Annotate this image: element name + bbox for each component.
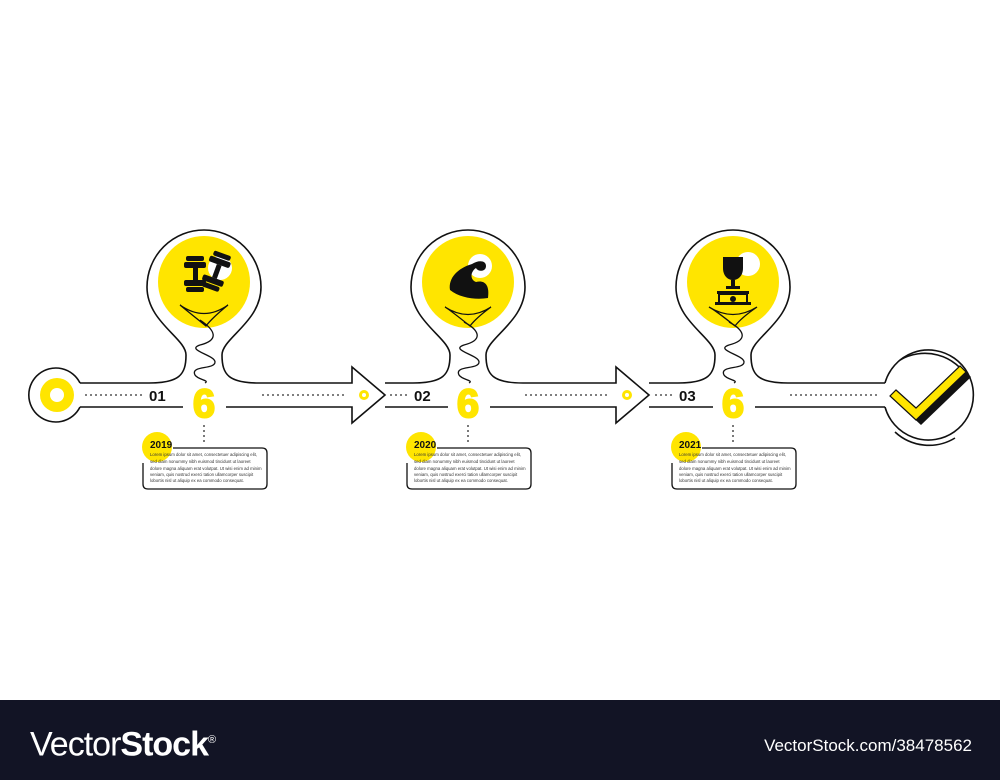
icon: dumbbells xyxy=(184,250,233,293)
start marker xyxy=(40,378,74,412)
text boxes: sed diam nonummy nibh euismod tincidunt ut laoreet xyxy=(150,459,251,464)
step numbers: 01 xyxy=(149,388,166,405)
text boxes: lobortis nisl ut aliquip ex ea commodo consequat. xyxy=(150,478,244,483)
text boxes: Lorem ipsum dolor sit amet, consectetuer adipiscing elit, xyxy=(679,452,786,457)
url text: VectorStock.com/38478562 xyxy=(764,736,972,755)
text boxes: lobortis nisl ut aliquip ex ea commodo consequat. xyxy=(679,478,773,483)
icon: trophy xyxy=(715,257,751,305)
dotted guides xyxy=(85,395,880,445)
logo text: VectorStock® xyxy=(30,725,215,763)
footer banner xyxy=(0,700,1000,780)
text boxes xyxy=(142,432,796,489)
step 2 bulb xyxy=(422,236,514,383)
step 1 bulb xyxy=(158,236,250,383)
step 3 bulb xyxy=(687,236,779,383)
text boxes: 2020 xyxy=(414,440,437,451)
text boxes: veniam, quis nostrud exerci tation ullamcorper suscipit xyxy=(679,472,783,477)
text boxes: 2019 xyxy=(150,440,173,451)
checkmark xyxy=(890,366,971,425)
text boxes: Lorem ipsum dolor sit amet, consectetuer adipiscing elit, xyxy=(150,452,257,457)
text boxes: Lorem ipsum dolor sit amet, consectetuer adipiscing elit, xyxy=(414,452,521,457)
step numbers: 03 xyxy=(679,388,696,405)
yellow sixes: 6 xyxy=(193,382,215,426)
text boxes: lobortis nisl ut aliquip ex ea commodo consequat. xyxy=(414,478,508,483)
text boxes: sed diam nonummy nibh euismod tincidunt ut laoreet xyxy=(679,459,780,464)
arrow dots xyxy=(359,390,632,400)
yellow sixes: 6 xyxy=(722,382,744,426)
track outline xyxy=(29,230,973,445)
text boxes: veniam, quis nostrud exerci tation ullamcorper suscipit xyxy=(414,472,518,477)
text boxes: veniam, quis nostrud exerci tation ullamcorper suscipit xyxy=(150,472,254,477)
text boxes: dolore magna aliquam erat volutpat. Ut wisi enim ad minim xyxy=(414,466,526,471)
step numbers: 02 xyxy=(414,388,431,405)
text boxes: sed diam nonummy nibh euismod tincidunt ut laoreet xyxy=(414,459,515,464)
step numbers xyxy=(149,388,696,405)
yellow sixes xyxy=(193,382,744,426)
text boxes: 2021 xyxy=(679,440,702,451)
icon: flexed arm xyxy=(450,261,488,299)
text boxes: dolore magna aliquam erat volutpat. Ut wisi enim ad minim xyxy=(679,466,791,471)
text boxes: dolore magna aliquam erat volutpat. Ut wisi enim ad minim xyxy=(150,466,262,471)
yellow sixes: 6 xyxy=(457,382,479,426)
